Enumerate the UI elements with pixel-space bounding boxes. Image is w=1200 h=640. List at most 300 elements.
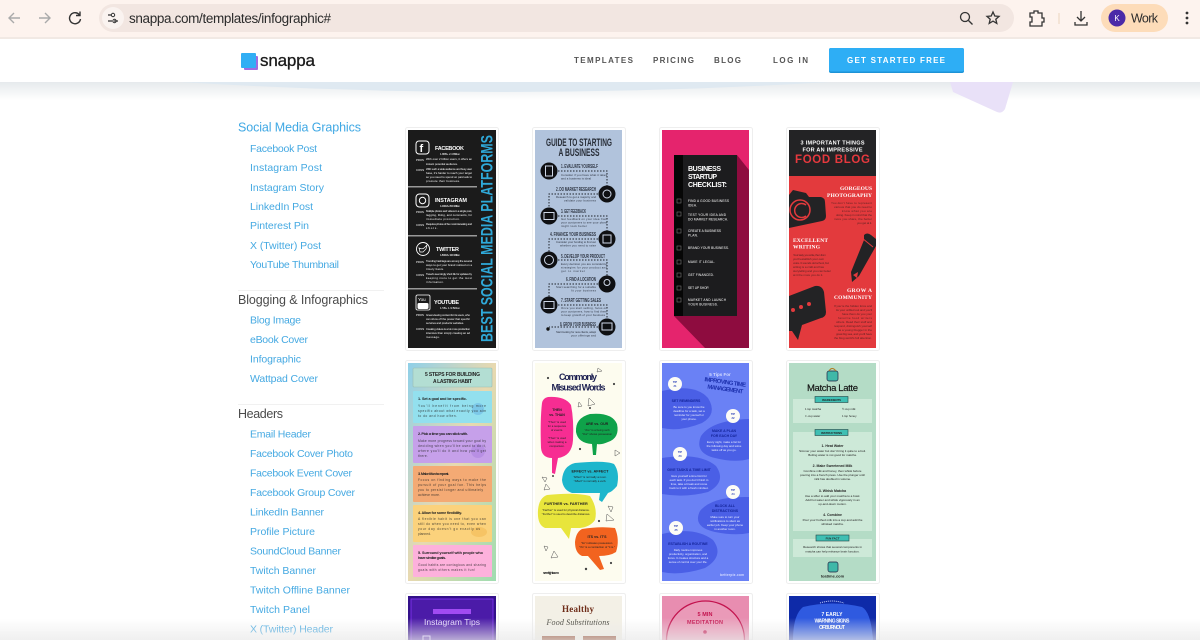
section text: community: If you're the hidden force and <box>834 304 872 308</box>
step text: Start looking for new clients, adapt <box>556 330 596 334</box>
tips: Make sure to turn your <box>711 515 739 519</box>
section text: writing: storytelling and you can better <box>793 269 831 273</box>
checklist title: STARTUP <box>688 174 717 181</box>
step text: 4. FINANCE YOUR BUSINESS <box>550 232 596 238</box>
instructions panel: 1. Heat Water <box>821 444 844 448</box>
row 3 template: instagram tips: Instagram Tips <box>424 617 480 627</box>
ingredients panel: 1 tsp matcha <box>805 407 821 411</box>
habit step 3: Focus on finding ways to make the <box>418 478 486 482</box>
row 3 template: healthy food substitutions <box>532 594 626 640</box>
menu links: PRICING <box>653 56 694 65</box>
template: matcha latte recipe <box>786 360 880 584</box>
food blog title: 3 IMPORTANT THINGS <box>800 140 865 146</box>
section text: photography: more you share, the better <box>834 217 872 221</box>
tips: MAKE A PLAN <box>712 429 736 433</box>
section text: community <box>834 288 872 340</box>
bubble: then vs than: when making a <box>548 440 567 444</box>
group: headers: Email Header <box>250 428 312 440</box>
title: Misused Words <box>552 382 606 392</box>
group: blogging and infographics: Blog Image <box>250 314 301 326</box>
row 3 template: 5 min meditation: MEDITATION <box>687 620 723 626</box>
checklist items: PLAN. <box>688 234 698 238</box>
bubble: effect vs affect: "Effect" is normally a noun. <box>573 475 607 479</box>
tips: Be sure to you know the <box>673 405 705 409</box>
tips: productivity, organization, and <box>669 552 707 556</box>
tips: GIVE TASKS A TIME LIMIT <box>667 468 712 472</box>
section text: community: its your unfiled out and you'll <box>836 308 872 312</box>
section: youtube: PROS <box>416 313 424 317</box>
section: youtube: Great viewing content for its users, who <box>426 313 470 317</box>
bubble: then vs than: THEN <box>552 408 562 412</box>
template: business startup checklist <box>660 128 752 350</box>
title: 5 Tips For <box>709 372 731 377</box>
group: social media graphics: LinkedIn Post <box>250 201 313 213</box>
title <box>546 137 612 159</box>
step text: Every decision you are considering <box>561 262 607 266</box>
group: social media graphics: Facebook Post <box>250 143 317 155</box>
section text: writing: EXCELLENT <box>793 238 828 244</box>
food blog title: FOR AN IMPRESSIVE <box>802 148 863 154</box>
section: instagram <box>416 194 472 230</box>
section: instagram: CONS <box>416 223 424 227</box>
section: facebook: instant potential audience. <box>426 162 458 166</box>
habit step 1: 1. Set a goal and be specific. <box>418 397 467 401</box>
ingredients panel: 1 tsp honey <box>842 414 857 418</box>
checkboxes <box>677 199 681 302</box>
habit step 3: 3. Make it fun to repeat. <box>418 472 449 476</box>
checklist items: BRAND YOUR BUSINESS. <box>688 246 729 250</box>
habit step 2: deciding when you'll be used to do it, <box>418 444 486 448</box>
checklist items: MARKET AND LAUNCH <box>688 298 727 302</box>
menu links: TEMPLATES <box>574 56 634 65</box>
fun fact panel: FUN FACT <box>826 536 840 540</box>
habit step 2: Make more progress toward your goal by <box>418 439 486 443</box>
profile pill <box>1101 4 1168 32</box>
section text: photography: PHOTOGRAPHY <box>827 193 872 199</box>
step text: 3. GET FEEDBACK <box>561 209 586 215</box>
section: instagram: INSTAGRAM <box>435 198 467 204</box>
habit step 3: achieve more. <box>418 493 440 497</box>
checklist items <box>688 199 729 306</box>
section: youtube: CONS <box>416 327 424 331</box>
tips: notifications to silent as <box>710 519 740 523</box>
bubble: then vs than: "Than" is used <box>548 436 566 440</box>
section: twitter: Trending hashtags are among the several <box>426 259 472 263</box>
row 3 template: warning signs of burnout: WARNING SIGNS <box>814 618 850 624</box>
tips: BLOCK ALL <box>715 504 736 508</box>
icon: matcha tea pot <box>827 368 838 381</box>
group: social media graphics: Instagram Post <box>250 162 322 174</box>
habit step 1: specific about what exactly you aim <box>418 409 486 413</box>
tips: earlier job. Keep your phone <box>707 523 744 527</box>
menu dots <box>1186 12 1188 24</box>
group: social media graphics: YouTube Thumbnail <box>250 259 339 271</box>
bubble: are vs our <box>576 414 618 455</box>
instructions panel <box>793 430 872 531</box>
section: facebook <box>416 141 472 183</box>
habit step 5: have similar goals. <box>418 556 446 560</box>
group: blogging and infographics <box>238 293 368 385</box>
section: youtube: intensive than simply creating an ad <box>426 331 470 335</box>
title: A BUSINESS <box>558 147 600 159</box>
ingredients panel: ½ cup milk <box>842 407 856 411</box>
habit step 4: planned. <box>418 532 431 536</box>
habit step 1 <box>413 391 492 423</box>
confetti dots <box>547 377 615 570</box>
section: twitter: Tweet's seemingly short life for updates by <box>426 272 473 276</box>
confetti triangles <box>542 368 620 558</box>
section text: community: favorite food writers <box>838 316 872 320</box>
step text: your customers, how to find them <box>561 310 608 314</box>
bubble: then vs than: "Then" is used <box>548 420 566 424</box>
habit title panel <box>413 368 492 387</box>
bubble: further vs farther: "Further" is used to describe distances. <box>542 512 590 516</box>
row 3 template: instagram tips <box>406 594 498 640</box>
checklist items: DO MARKET RESEARCH. <box>688 218 728 222</box>
step text: Once you start selling, focus on <box>561 306 607 310</box>
address bar: snappa.com/templates/infographic# <box>129 11 331 26</box>
habit title panel: A LASTING HABIT <box>433 379 472 385</box>
group: social media graphics: Pinterest Pin <box>250 220 309 232</box>
row 3 template: warning signs of burnout <box>786 594 880 640</box>
habit step 4 <box>413 505 492 542</box>
section: instagram: Requires photos of the most interesting and <box>426 222 472 226</box>
bubble: then vs than <box>541 397 573 474</box>
bubble: its vs it's: ITS vs. IT'S <box>587 535 607 539</box>
template: commonly misused words <box>532 360 626 584</box>
section text: community: respond, distinguish yourself <box>834 324 872 328</box>
section text: photography: know what you are <box>842 209 872 213</box>
habit step 2 <box>413 426 492 463</box>
ingredients panel: INGREDIENTS <box>822 398 841 402</box>
habit step 4: 4. Allow for some flexibility. <box>418 511 462 515</box>
fun fact panel: Research shows that several components in <box>803 545 862 549</box>
step text: Start searching for a suitable <box>556 285 596 289</box>
step text: to keep growth of your business <box>561 313 606 317</box>
template: improving time management <box>660 360 752 584</box>
section: twitter: TWITTER <box>436 247 459 253</box>
checklist items: GET FINANCED. <box>688 273 714 277</box>
section: youtube: message. <box>426 335 440 339</box>
section: facebook: so you need to spend on paid ads to <box>426 175 472 179</box>
template: improving time management: TIP <box>678 450 682 454</box>
section: instagram: PROS <box>416 210 424 214</box>
fun fact panel <box>793 535 872 557</box>
row 3 template: 5 min meditation: 5 MIN <box>698 612 713 618</box>
section text: community: the blog world's full attention. <box>834 336 872 340</box>
tips: FOR EACH DAY <box>711 434 738 438</box>
ingredients panel <box>793 396 872 423</box>
template: building a lasting habit <box>406 360 498 584</box>
habit step 2: 2. Pick a time you can stick with. <box>418 432 468 436</box>
section: youtube: 1.5B+ 1.9 Billion <box>440 306 460 310</box>
section text: community: COMMUNITY <box>834 295 872 301</box>
instructions panel: Pour your frothed milk into a cup and add the <box>803 518 863 522</box>
bubble: are vs our: ARE vs. OUR <box>586 422 609 426</box>
section: instagram: Multiple photos and videos in a single post, <box>426 209 472 213</box>
tips: the following day and solve <box>707 444 742 448</box>
row 3 template: warning signs of burnout: 7 EARLY <box>822 612 843 618</box>
step text: your offerings and <box>571 334 596 338</box>
ingredients panel: ¾ cup water <box>805 414 820 418</box>
checklist title: BUSINESS <box>688 166 721 173</box>
row 3 template: 5 min meditation <box>660 594 752 640</box>
site navigation bar <box>0 39 1200 82</box>
checklist items: YOUR BUSINESS. <box>688 302 718 306</box>
step text: 2. DO MARKET RESEARCH <box>556 187 596 193</box>
habit step 5 <box>413 545 492 577</box>
section text: writing: Your tasty you write, then from <box>793 253 826 257</box>
tips: each task. If you don't finish in <box>670 478 709 482</box>
tips: Give yourself a time limit for <box>671 474 707 478</box>
section text: community: great big sea, and you'll have <box>836 332 872 336</box>
bubble: then vs than: of events. <box>551 428 563 432</box>
checklist items: CREATE A BUSINESS <box>688 229 721 233</box>
group: headers: Facebook Cover Photo <box>250 448 353 460</box>
step text <box>550 164 608 338</box>
section: twitter: PROS <box>416 260 424 264</box>
row 3 template: healthy food substitutions: Healthy <box>562 604 594 614</box>
checklist items: TEST YOUR IDEA AND <box>688 213 727 217</box>
habit step 5: goals with others makes it fun! <box>418 568 475 572</box>
template: guide to starting a business <box>532 128 626 350</box>
navigation icons <box>9 12 80 24</box>
bubble: are vs our: "Our" shows possession <box>582 432 613 436</box>
tips <box>667 399 744 577</box>
group: headers: Headers <box>238 407 283 421</box>
bubble: are vs our: "Are" is a being verb <box>584 428 610 432</box>
checklist items: IDEA. <box>688 204 697 208</box>
food blog title: FOOD BLOG <box>795 154 870 166</box>
group: headers: X (Twitter) Header <box>250 624 334 636</box>
group: headers <box>238 407 356 636</box>
logo: snappa <box>260 51 316 70</box>
template: improving time management: #2 <box>731 416 735 420</box>
habit step 2: there. <box>418 454 428 458</box>
instructions panel: 3. Whisk Matcha <box>819 489 846 493</box>
section: facebook: FACEBOOK <box>435 146 464 152</box>
day markers <box>668 377 740 535</box>
section text: community: others. Read their stuff and <box>836 320 872 324</box>
tips: Daily routine improves <box>674 548 703 552</box>
template: improving time management: TIP <box>731 488 735 492</box>
group: headers: LinkedIn Banner <box>250 506 324 518</box>
title: Matcha Latte <box>807 383 858 394</box>
template: best social media platforms: BEST SOCIAL MEDIA PLATFORMS <box>478 135 496 342</box>
habit step 5: 5. Surround yourself with people who <box>418 551 484 555</box>
template: improving time management: #4 <box>731 492 735 496</box>
instructions panel: pouring into a french press. Use the plunger until <box>800 473 865 477</box>
section text: community: GROW A <box>847 288 872 294</box>
section text: writing: WRITING <box>793 244 821 250</box>
title <box>552 372 606 392</box>
bubble: its vs it's: "Its" indicates possession. <box>581 541 613 545</box>
tips: in another room. <box>714 527 736 531</box>
group: social media graphics: Social Media Graphics <box>238 120 361 134</box>
title <box>704 372 746 396</box>
section text: writing: writing is a craft and has <box>793 265 824 269</box>
section: facebook: base, it's harder to reach your target <box>426 171 472 175</box>
group: headers: Twitch Offline Banner <box>250 584 350 596</box>
step markers <box>540 162 616 336</box>
group: headers: Facebook Event Cover <box>250 468 352 480</box>
section: facebook: PROS <box>416 158 424 162</box>
habit step 1: to do and how often. <box>418 414 457 418</box>
sidebar category list <box>238 120 384 636</box>
section: twitter: timely basis. <box>426 267 444 271</box>
bubble: further vs farther <box>538 494 596 539</box>
bottom fade <box>0 618 1200 640</box>
step text: Get feedback on your idea from <box>561 217 608 221</box>
title: GUIDE TO STARTING <box>546 137 612 149</box>
section: youtube: You <box>418 297 426 302</box>
menu links: LOG IN <box>773 56 808 65</box>
tips: back to it with a fresh mindset. <box>670 486 709 490</box>
title: MANAGEMENT <box>707 385 744 396</box>
section: facebook: With over 2 billion users, it offers an <box>426 157 472 161</box>
group: blogging and infographics: Infographic <box>250 354 301 366</box>
profile pill: K <box>1114 14 1120 23</box>
footer logo: teatime.com <box>821 574 845 578</box>
tips: tasks off as you go. <box>712 448 737 452</box>
bubble: further vs farther: "Farther" is used for physical distance. <box>542 508 590 512</box>
instructions panel: whisked matcha. <box>821 522 844 526</box>
step text: 5. DEVELOP YOUR PRODUCT <box>561 254 605 260</box>
habit step 3: you to persist longer and ultimately <box>418 488 483 492</box>
step glyphs <box>544 166 612 330</box>
button: get started free: GET STARTED FREE <box>847 56 946 65</box>
title: IMPROVING TIME <box>704 377 746 389</box>
step text: strategies for your product and <box>561 266 607 270</box>
step text: 7. START GETTING SALES <box>561 298 601 304</box>
habit step 1: You'll benefit from being more <box>418 404 486 408</box>
step text: Consider if you have what it takes <box>561 173 608 177</box>
bubble: effect vs affect <box>562 462 618 502</box>
instructions panel: 2. Make Sweetened Milk <box>813 464 852 468</box>
food blog title <box>795 140 870 166</box>
section: instagram: 1.000M+ 800 Million <box>440 204 460 208</box>
decorative purple card <box>950 82 1013 113</box>
bubble: then vs than: for a sequence <box>548 424 567 428</box>
section: youtube: YOUTUBE <box>434 300 459 306</box>
dotted path <box>549 171 607 327</box>
section: twitter: information. <box>426 280 444 284</box>
habit step 4: still do when you need to, even when <box>418 522 486 526</box>
step text: whether you need to raise <box>560 244 596 248</box>
bubble: then vs than: comparison. <box>549 444 565 448</box>
bubble: effect vs affect: EFFECT vs. AFFECT <box>572 470 609 474</box>
group: social media graphics: Instagram Story <box>250 182 325 194</box>
site header shadow and curve <box>0 82 1200 113</box>
section: facebook: promote their business. <box>426 179 460 183</box>
checklist title: CHECKLIST: <box>688 182 727 189</box>
section: facebook: 1.86B+ 2.4 Billion <box>440 152 460 156</box>
step text: and a business is ideal <box>561 176 591 180</box>
section: facebook: f <box>420 143 424 155</box>
section: instagram: shots. <box>426 226 438 230</box>
footer logo <box>821 562 845 578</box>
browser toolbar <box>0 0 1200 39</box>
group: headers: Twitch Panel <box>250 604 310 616</box>
tips: focus. It creates structure and a <box>668 556 709 560</box>
section: twitter <box>416 242 473 284</box>
section: facebook: With such a wide audience and busy user <box>426 167 472 171</box>
tips: Every night, make a list for <box>707 440 741 444</box>
bubble: effect vs affect: "Affect" is normally a verb. <box>574 479 606 483</box>
tips: ESTABLISH A ROUTINE <box>668 542 708 546</box>
step text: 6. FIND A LOCATION <box>566 277 596 283</box>
tips: SET REMINDERS <box>672 399 701 403</box>
habit step 3: pursuit of your goal fun. This helps <box>418 483 486 487</box>
section: twitter: CONS <box>416 273 424 277</box>
section text: community: have them do you your <box>842 312 872 316</box>
step text: get to market <box>561 269 585 273</box>
group: blogging and infographics: Blogging & Infographics <box>238 293 368 307</box>
instructions panel: milk has doubled in volume. <box>814 477 851 481</box>
group: blogging and infographics: eBook Cover <box>250 334 308 346</box>
toolbar icons <box>960 11 1087 26</box>
section text: writing: voice. It sounds old school, but <box>793 261 829 265</box>
row 3 template: warning signs of burnout: OF BURNOUT <box>819 625 845 631</box>
icon: camera <box>789 190 826 228</box>
instructions panel: Use a sifter to add your matcha to a bowl. <box>805 494 860 498</box>
bubble: then vs than: vs. THAN <box>549 413 565 417</box>
template: improving time management: #5 <box>674 528 678 532</box>
template: food blog <box>786 128 880 350</box>
template: improving time management: TIP <box>673 380 677 384</box>
habit step 4: A flexible habit is one that you can <box>418 517 486 521</box>
step text: Research to get a majority and <box>556 195 596 199</box>
section: youtube: can show off the power that specific <box>426 317 471 321</box>
step text: might look better <box>561 224 587 228</box>
template: improving time management: #1 <box>673 384 677 388</box>
step text: fit your business <box>571 288 597 292</box>
habit step 4: your day doesn't go exactly as <box>418 527 480 531</box>
section: facebook: CONS <box>416 168 424 172</box>
checklist items: FIND A GOOD BUSINESS <box>688 199 729 203</box>
step text: your customers to see your plans <box>561 220 608 224</box>
section: twitter: keeping more to get the most <box>426 276 472 280</box>
address bar <box>99 4 1014 32</box>
group: headers: SoundCloud Banner <box>250 546 342 558</box>
section: instagram: immediate promotion. <box>426 217 460 221</box>
checklist items: SET UP SHOP. <box>688 286 709 290</box>
habit step 2: where you'll do it and how you'll get <box>418 449 486 453</box>
tips: betterpix.com <box>720 573 744 577</box>
bubble: its vs it's <box>575 527 618 570</box>
instructions panel: Boiling water is not good for matcha. <box>808 453 857 457</box>
template: improving time management: TIP <box>731 412 735 416</box>
icon: speech bubble <box>789 286 826 340</box>
habit step 3 <box>413 466 492 502</box>
section text: writing: you'll establish your own <box>793 257 824 261</box>
tips: DISTRACTIONS <box>712 509 739 513</box>
source: samlight.com <box>543 571 560 575</box>
tips: your phone. <box>681 417 697 421</box>
group: social media graphics: X (Twitter) Post <box>250 240 321 252</box>
title: Commonly <box>559 372 597 382</box>
bubble: further vs farther: FURTHER vs. FARTHER <box>544 502 588 506</box>
section text: photography: various that you do need to <box>834 205 872 209</box>
step text: 1. EVALUATE YOURSELF <box>561 164 598 170</box>
background blobs <box>662 388 749 573</box>
tips: deadline for a task, set a <box>673 409 705 413</box>
step text: validate your business <box>564 198 597 202</box>
section: youtube: services and products websites. <box>426 321 464 325</box>
template: improving time management: #3 <box>678 454 682 458</box>
icon: pencil <box>851 234 876 282</box>
habit title panel: 5 STEPS FOR BUILDING <box>425 372 480 378</box>
